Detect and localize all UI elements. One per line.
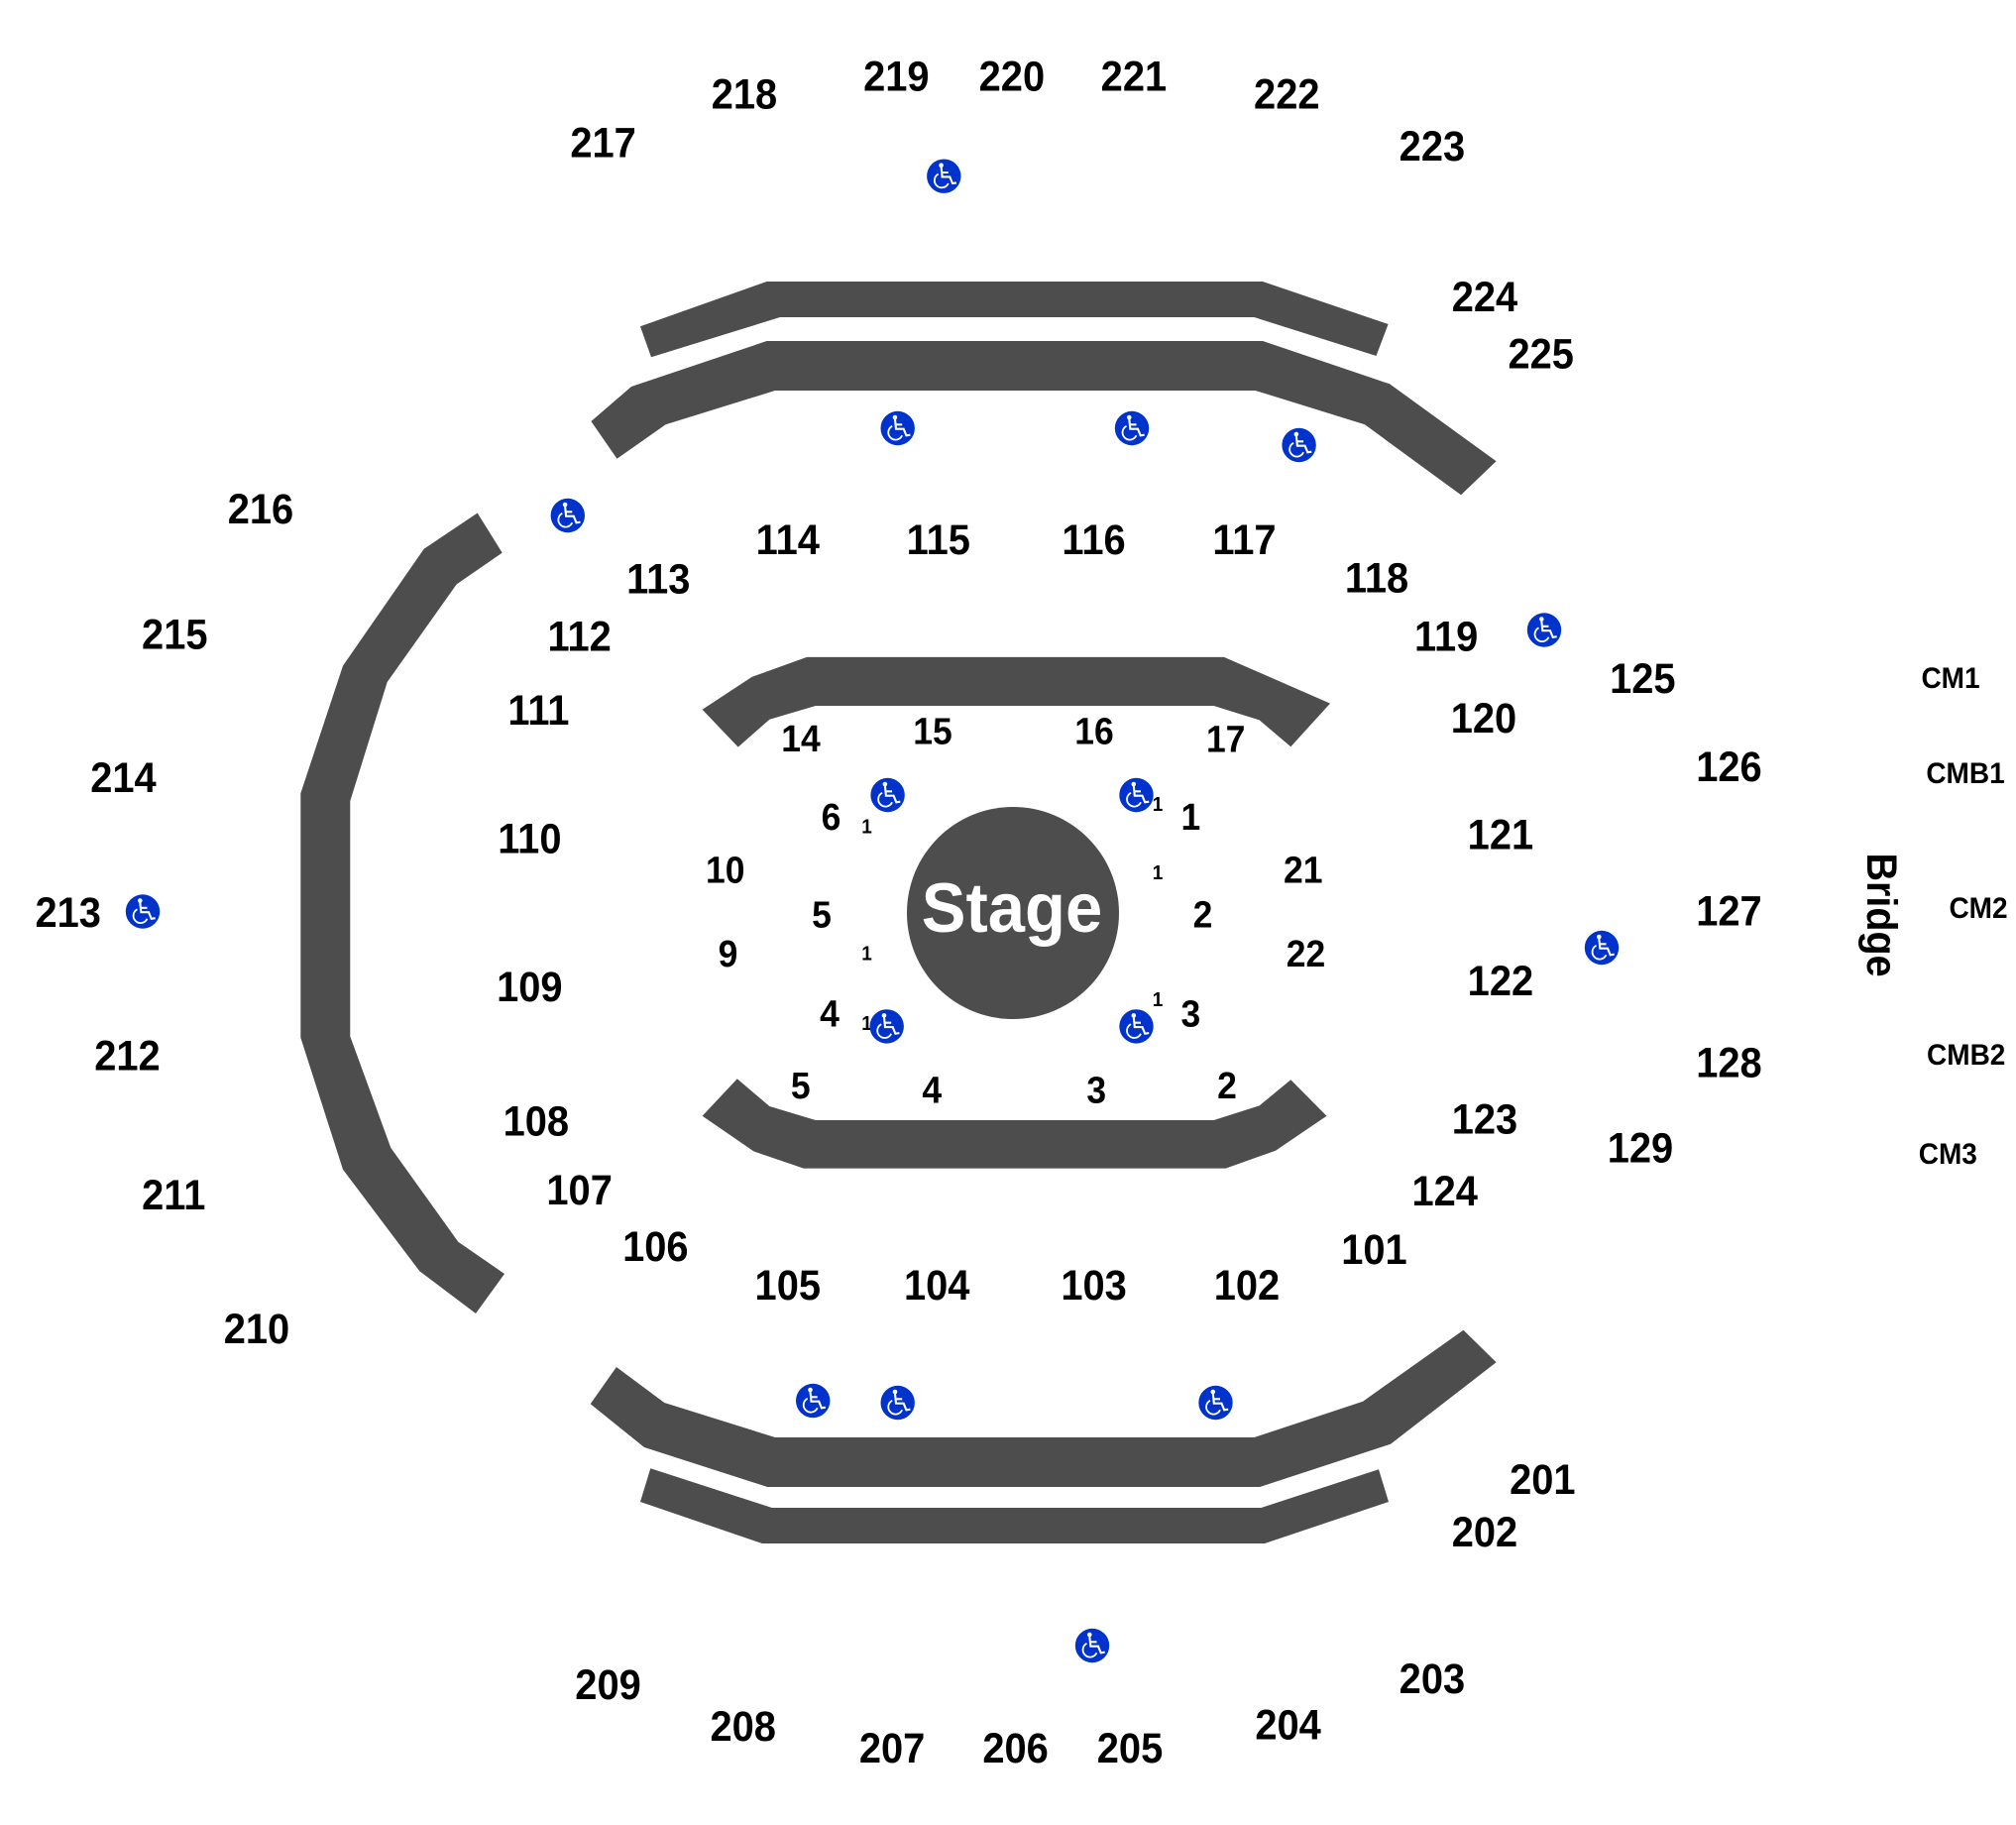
section labels 100 level: 122 <box>1468 958 1533 1004</box>
section labels 100 level: 120 <box>1451 695 1516 741</box>
section labels 200 level: 218 <box>712 71 777 118</box>
floor section labels: 2 <box>1217 1065 1237 1106</box>
section labels 200 level: 217 <box>570 119 636 167</box>
floor section labels: 3 <box>1086 1070 1106 1111</box>
section labels 200 level: 211 <box>142 1172 205 1218</box>
section labels 100 level: 126 <box>1696 743 1762 790</box>
icon: wheelchair <box>1527 613 1561 647</box>
section labels 200 level: 201 <box>1510 1456 1576 1503</box>
section labels 200 level: 223 <box>1400 123 1465 170</box>
stage circle <box>907 807 1119 1019</box>
icon: wheelchair <box>870 778 905 812</box>
section labels 200 level: 225 <box>1509 330 1574 378</box>
section labels 100 level: 116 <box>1062 516 1126 563</box>
upper tier bars <box>300 282 1497 1543</box>
icon: wheelchair <box>1198 1386 1233 1420</box>
icon: wheelchair <box>1119 1009 1154 1044</box>
floor section labels: 4 <box>820 993 840 1035</box>
section labels 200 level: 202 <box>1452 1509 1517 1555</box>
section labels 100 level: 105 <box>755 1262 821 1309</box>
section labels 200 level: 212 <box>94 1033 161 1080</box>
icon: wheelchair <box>870 1009 904 1044</box>
section labels 100 level: 119 <box>1414 613 1478 660</box>
bar: bottom inner upper tier <box>591 1330 1497 1487</box>
bar: bottom floor <box>703 1079 1326 1169</box>
section labels 100 level: 123 <box>1452 1095 1517 1143</box>
section labels 100 level: 121 <box>1468 812 1533 858</box>
section labels 200 level: 215 <box>142 611 208 658</box>
small row 1 markers <box>861 793 1163 1035</box>
icon: wheelchair <box>126 894 160 929</box>
stage <box>907 807 1119 1019</box>
floor section labels: 2 <box>1193 894 1212 936</box>
icon: wheelchair <box>927 159 961 193</box>
stage label: Stage <box>922 868 1102 947</box>
icon: wheelchair <box>796 1384 830 1418</box>
section labels 200 level: 214 <box>90 754 157 801</box>
section labels 100 level: 103 <box>1061 1262 1127 1309</box>
section labels 100 level: 114 <box>756 516 820 563</box>
section labels 100 level: 102 <box>1214 1262 1280 1309</box>
bar: left curved tier <box>300 513 504 1313</box>
section labels 100 level: 129 <box>1608 1124 1673 1172</box>
section labels 200 level: 213 <box>35 889 101 936</box>
section labels 100 level: 104 <box>904 1262 970 1309</box>
icon: wheelchair <box>551 499 585 532</box>
section labels 100 level: 107 <box>546 1167 613 1213</box>
section labels 100 level: 115 <box>907 516 970 563</box>
icon: wheelchair <box>1115 411 1149 445</box>
floor section labels: 5 <box>791 1065 811 1106</box>
section labels 200 level: 224 <box>1452 274 1517 320</box>
section labels 200 level: 216 <box>228 486 293 532</box>
section labels 100 level: 118 <box>1345 555 1408 602</box>
section labels 100 level: 125 <box>1610 655 1676 702</box>
marker 1: 1 <box>861 943 872 965</box>
label: CM2: CM2 <box>1949 892 2008 925</box>
bar: top outer upper tier <box>640 282 1389 357</box>
section labels 100 level: 113 <box>626 556 690 603</box>
bar: bottom outer upper tier <box>640 1468 1389 1543</box>
section labels 100 level: 111 <box>507 687 569 734</box>
section labels 200 level: 222 <box>1254 71 1320 118</box>
section labels 100 level: 108 <box>504 1097 569 1145</box>
floor section labels: 10 <box>706 850 745 891</box>
section labels 100 level: 124 <box>1412 1168 1478 1214</box>
section labels 200 level: 206 <box>982 1725 1049 1771</box>
section labels 100 level: 110 <box>498 816 561 862</box>
label: CMB2: CMB2 <box>1927 1040 2005 1072</box>
section labels 200 level: 207 <box>859 1725 925 1771</box>
section labels 100 level: 109 <box>497 964 563 1010</box>
section labels 100 level: 106 <box>622 1223 689 1270</box>
floor section labels: 17 <box>1206 719 1245 760</box>
label: CMB1: CMB1 <box>1926 757 2005 790</box>
section labels 200 level: 204 <box>1255 1701 1321 1749</box>
icon: wheelchair <box>880 411 915 445</box>
floor section labels: 4 <box>922 1070 943 1111</box>
section labels 100 level <box>497 516 1762 1309</box>
section labels 100 level: 128 <box>1696 1040 1762 1086</box>
marker 1: 1 <box>861 816 872 839</box>
section labels 100 level: 112 <box>548 613 612 660</box>
floor section labels: 9 <box>719 933 737 974</box>
floor section labels: 14 <box>781 718 821 759</box>
floor section labels: 16 <box>1074 711 1114 752</box>
section labels 200 level: 205 <box>1097 1725 1163 1771</box>
marker 1: 1 <box>1153 861 1163 884</box>
icon: wheelchair <box>880 1386 915 1420</box>
floor section labels: 15 <box>913 711 952 752</box>
section labels 200 level: 210 <box>224 1306 289 1352</box>
floor section labels: 21 <box>1284 850 1323 891</box>
floor section labels: 22 <box>1287 933 1325 974</box>
label: CM3: CM3 <box>1919 1139 1977 1171</box>
section labels 200 level: 209 <box>575 1661 641 1708</box>
floor section labels: 6 <box>822 796 840 838</box>
label: CM1: CM1 <box>1921 663 1980 695</box>
floor section labels: 5 <box>812 894 832 936</box>
bridge and CM labels <box>1858 663 2008 1171</box>
section labels 200 level: 219 <box>863 54 930 100</box>
section labels 100 level: 127 <box>1696 887 1762 935</box>
section labels 200 level: 221 <box>1101 54 1167 100</box>
icon: wheelchair <box>1282 428 1316 462</box>
section labels 200 level: 220 <box>979 54 1045 100</box>
icon: wheelchair <box>1585 931 1619 965</box>
icon: wheelchair <box>1075 1629 1109 1662</box>
floor section labels: 1 <box>1181 796 1200 838</box>
bar: top inner upper tier <box>591 341 1497 495</box>
bar: top floor <box>703 657 1330 747</box>
floor section labels: 3 <box>1181 993 1200 1035</box>
label: Bridge: Bridge <box>1858 853 1905 977</box>
icon: wheelchair <box>1119 778 1154 812</box>
marker 1: 1 <box>1153 988 1163 1011</box>
section labels 200 level: 208 <box>710 1703 776 1750</box>
marker 1: 1 <box>861 1012 872 1035</box>
section labels 200 level: 203 <box>1400 1655 1465 1702</box>
marker 1: 1 <box>1153 793 1163 816</box>
section labels 100 level: 117 <box>1212 516 1277 563</box>
section labels 200 level <box>35 54 1576 1771</box>
floor section labels <box>706 711 1325 1111</box>
wheelchair icons <box>126 159 1619 1662</box>
section labels 100 level: 101 <box>1341 1226 1407 1273</box>
